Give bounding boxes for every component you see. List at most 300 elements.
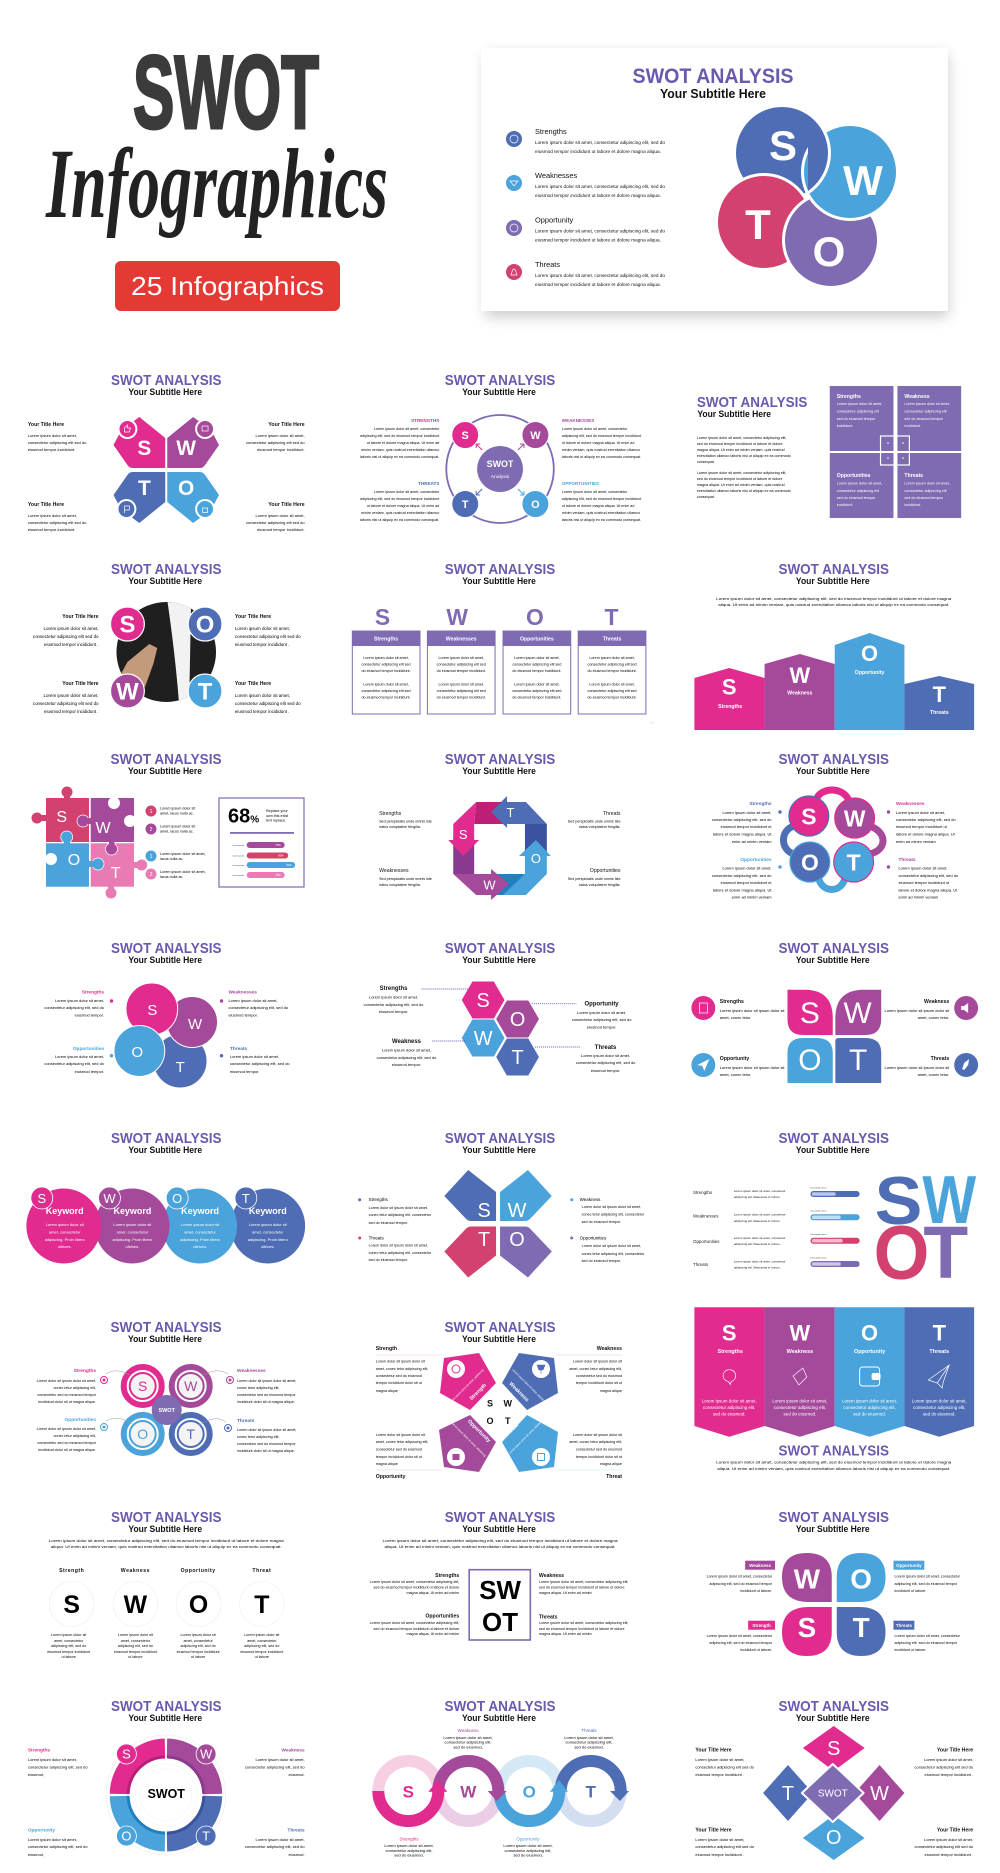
text: left: Lorem ipsum dolor sit amet, — [55, 1054, 104, 1059]
banner: threats: sed do eiusmod. — [923, 1411, 956, 1416]
chart: ring — [446, 415, 554, 523]
text: left: Lorem dolor sit ipsum dolor sit amet, — [37, 1379, 96, 1383]
text: strengths: Lorem ipsum dolor sit amet, consectetur — [374, 427, 440, 431]
chart: connected circles: S — [801, 803, 816, 830]
text: left: Strengths — [435, 1573, 459, 1579]
text: right: labore et dolore magna aliqua. Ut — [896, 832, 956, 837]
body text: magna aliqua. Ut enim ad minim veniam, quis nostrud — [697, 448, 785, 452]
text: threats: Lorem ipsum dolor sit amet, consectetur — [374, 490, 440, 494]
text blocks: natus voluptatem fringilla. — [379, 883, 421, 887]
text blocks: eiusmod tempor incididunt. — [257, 447, 305, 452]
banner: threats: Threats — [929, 1349, 949, 1355]
text: left — [358, 1197, 432, 1262]
text: right: conec tetur adipiscing elit, — [237, 1435, 279, 1439]
chain letters: O — [523, 1783, 536, 1802]
panel: octagon arrows — [379, 752, 621, 900]
keyword texts: adipiscing. Proin libero — [45, 1237, 85, 1242]
text: right — [220, 990, 290, 1074]
text: left: Strengths — [74, 1368, 96, 1374]
text blocks: consectetur adipiscing elit sed do — [33, 634, 99, 639]
text blocks: eiusmod tempor incididunt . — [695, 1852, 744, 1857]
progress bars: Description here — [810, 1233, 827, 1236]
subtitle: Your Subtitle Here — [796, 1713, 870, 1723]
numbered list: 1 — [150, 854, 153, 860]
chart: connected circles: O — [801, 849, 819, 876]
chart: leaves: S — [800, 997, 820, 1030]
text: threats: Threats — [595, 1045, 617, 1051]
text blocks: consectetur adipiscing elit sed do — [28, 520, 87, 525]
chart: puzzle pieces — [32, 786, 147, 898]
text: right: Lorem ipsum dolor sit amet, consectetur adipiscing elit, — [539, 1580, 628, 1584]
text: strengths: eiusmod tempor. — [379, 1009, 408, 1014]
chart: drops: W — [794, 1564, 821, 1595]
subtitle: Your Subtitle Here — [796, 1145, 870, 1155]
text: right: magna alique — [600, 1389, 622, 1393]
text blocks: consectetur adipiscing elit sed do — [28, 440, 87, 445]
text: left: Lorem dolor sit ipsum dolor sit — [376, 1433, 425, 1437]
chart: cycle arrows: O — [531, 851, 541, 866]
chart: ring: W — [530, 430, 541, 442]
quadrant grid: Threats — [904, 473, 923, 479]
heading: Infographics script: Infographics — [45, 128, 388, 239]
subtitle: Your Subtitle Here — [128, 1524, 202, 1534]
text: right: magna alique — [600, 1462, 622, 1466]
keyword texts: ultrices. — [58, 1244, 72, 1249]
text blocks: incididunt ut labore. — [740, 1589, 772, 1593]
big letters: T — [605, 604, 619, 630]
chart: circles: W — [103, 1191, 116, 1206]
panel: four violet quadrants — [697, 386, 961, 518]
text blocks: Lorem ipsum dolor sit amet, consectetur — [894, 1634, 961, 1638]
text: weakness: eiusmod tempor. — [392, 1062, 421, 1067]
leader lines — [376, 1355, 622, 1470]
text blocks: Lorem ipsum dolor sit amet, — [44, 693, 99, 698]
text: right — [237, 1368, 296, 1453]
intro text: aliqua. Ut enim ad minim veniam, quis nostrud exercitation ullamco laboris nisi ut aliquip ex ea commodo consequat. — [718, 602, 949, 607]
progress bars — [810, 1186, 860, 1267]
quadrant grid: Lorem ipsum dolor sit amet, — [837, 402, 882, 406]
text: strengths: sed do eiusmod, — [394, 1852, 424, 1858]
text: left: conec tetur adipiscing elit, — [54, 1386, 96, 1390]
text: right: consectetur sed do eiusmod tempor — [237, 1442, 296, 1446]
chart letters — [745, 122, 883, 275]
text blocks: Your Title Here — [28, 422, 64, 428]
intro text — [383, 1538, 618, 1549]
text blocks: Lorem ipsum dolor sit amet, — [28, 433, 77, 438]
text: right: tempor incididunt dolor sit ut — [576, 1381, 622, 1385]
intro text: Lorem ipsum dolor sit amet, consectetur adipiscing elit, sed do eiusmod tempor incididunt ut labore et dolore magna — [383, 1538, 618, 1543]
body text: Lorem ipsum dolor sit amet, consectetur adipiscing elit, — [697, 436, 786, 440]
text: opportunities: Lorem ipsum dolor sit amet, consectetur — [562, 490, 628, 494]
stat box: Lorem ipsum — [232, 865, 244, 867]
text: right: eiusmod tempor. — [228, 1013, 258, 1018]
bar chart: house bars: Opportunity — [855, 670, 884, 676]
title: SWOT ANALYSIS — [111, 1699, 222, 1715]
text blocks: Lorem ipsum dolor sit ipsum dolor sit — [884, 1065, 950, 1070]
chart: pentagons: Strength — [469, 1383, 488, 1402]
text: left: amet, conec tetur adipiscing elit, — [376, 1440, 428, 1444]
text blocks — [28, 1748, 305, 1857]
text: right: Weaknesses — [237, 1368, 266, 1374]
text: right: conec tetur adipiscing elit, consectetur — [582, 1213, 645, 1217]
subtitle: Your Subtitle Here — [128, 1145, 202, 1155]
title: SWOT ANALYSIS — [110, 752, 222, 768]
text: right: sed do eiusmod tempor incididunt ut labore et dolore — [539, 1586, 625, 1590]
subtitle: Your Subtitle Here — [796, 766, 870, 776]
text: right: Weaknesses — [896, 801, 925, 807]
panel: double rings — [37, 1320, 296, 1453]
text: left: Opportunities — [65, 1417, 96, 1423]
chart: cycle arrows: S — [459, 827, 468, 842]
text blocks: Your Title Here — [62, 681, 99, 687]
chart: pinwheel circles — [716, 106, 898, 288]
quadrant grid: Opportunities — [837, 473, 871, 479]
text blocks: eiusmod tempor incididunt. — [28, 527, 75, 532]
text blocks: eiusmod tempor incididunt . — [924, 1772, 973, 1777]
chart: diamonds: SWOT — [818, 1789, 848, 1800]
chart: puzzle pieces: W — [95, 820, 111, 837]
banner: opportunity: consectetur adipiscing elit, — [843, 1405, 896, 1410]
text: opportunities: adipiscing elit, sed do eiusmod tempor incididunt — [562, 497, 641, 501]
text: left: amet, conec tetur adipiscing elit, — [376, 1367, 428, 1371]
panel: puzzle — [32, 752, 304, 898]
big letters — [375, 604, 619, 630]
ring letters: SWOT — [158, 1408, 176, 1414]
labels: Weaknesses — [693, 1214, 719, 1219]
chart: leaves — [787, 990, 881, 1083]
quadrant grid: Strengths — [837, 394, 861, 400]
text: threats: Lorem ipsum dolor sit amet, — [581, 1053, 630, 1058]
text: strengths: adipiscing elit, sed do eiusmod tempor incididunt — [360, 434, 439, 438]
text blocks: consectetur adipiscing elit sed do — [695, 1844, 755, 1849]
panel: pentagons — [376, 1320, 622, 1480]
text blocks: Sed perspiciatis unde omnis iste — [568, 877, 621, 881]
text: right: consectetur sed do eiusmod tempor — [237, 1393, 296, 1397]
chart: cycle arrows — [448, 796, 551, 900]
column: weakness: Lorem ipsum dolor sit — [118, 1633, 153, 1637]
quadrant grid: sed do eiusmod tempor — [904, 417, 944, 421]
text blocks: consectetur adipiscing elit sed do — [246, 440, 305, 445]
numbered list: 2 — [150, 827, 153, 833]
text: left: Lorem dolor sit ipsum dolor sit — [376, 1360, 425, 1364]
text: threats: THREATS — [418, 481, 439, 486]
text: left: Lorem ipsum dolor sit amet, consectetur adipiscing elit, — [370, 1580, 459, 1584]
column: opportunities: consectetur adipiscing elit sed — [512, 662, 561, 667]
ring letters: S — [122, 1746, 131, 1762]
text blocks: Your Title Here — [62, 614, 99, 620]
text: weaknesses: ut labore et dolore magna aliqua. Ut enim ad — [562, 441, 634, 445]
column: strength: amet, consectetur — [54, 1639, 84, 1643]
text: left: Opportunities — [73, 1046, 104, 1052]
text blocks: Sed perspiciatis unde omnis iste — [379, 820, 432, 824]
list: weaknesses: Lorem ipsum dolor sit amet, consectetur adipiscing elit, sed do — [535, 184, 665, 190]
text blocks: Your Title Here — [268, 422, 305, 428]
text blocks: Lorem ipsum dolor sit amet, — [256, 513, 305, 518]
chart: kites — [444, 1170, 552, 1278]
text: right — [539, 1573, 628, 1636]
text: left: magna alique — [376, 1389, 398, 1393]
bar chart: house bars: Weakness — [787, 690, 813, 697]
title: SWOT ANALYSIS — [445, 373, 556, 389]
text: right: Threats — [230, 1046, 247, 1052]
text blocks: amet, conec tetur. — [918, 1072, 949, 1077]
column: weakness: eiusmod tempor incididunt — [114, 1650, 157, 1654]
text: opportunity: consectetur adipiscing elit, — [505, 1848, 551, 1853]
column: threats — [578, 631, 646, 714]
big letters: O — [526, 604, 544, 630]
banner: threats: consectetur adipiscing elit, — [913, 1405, 965, 1410]
text: left: Lorem ipsum dolor sit amet, — [722, 866, 772, 871]
chart: pentagons — [439, 1353, 558, 1472]
list: opportunity: eiusmod tempor incididunt ut labore et dolore magna aliqua. — [535, 238, 661, 244]
column: strengths: do eiusmod tempor incididunt. — [362, 669, 411, 673]
icon: speaker — [954, 996, 978, 1020]
title: SWOT ANALYSIS — [110, 1320, 222, 1336]
text blocks — [33, 614, 301, 714]
column: opportunity: adipiscing elit, sed do — [181, 1644, 216, 1648]
text: right: Weakness — [597, 1346, 622, 1352]
chain letters: S — [403, 1783, 414, 1802]
quadrant grid: Lorem ipsum dolor sit amet, — [904, 402, 950, 406]
chart: pentagons: Lorem ipsum dolor sit amet, adipiscing — [511, 1368, 548, 1405]
descriptions: adipiscing elit. Maecenas in rutrum. — [734, 1242, 781, 1246]
list: opportunity: Opportunity — [535, 216, 574, 224]
text blocks: eiusmod tempor incididunt . — [695, 1772, 744, 1777]
text blocks: consectetur adipiscing elit sed do — [915, 1844, 974, 1849]
text blocks — [707, 1575, 961, 1652]
text: left: Opportunities — [425, 1614, 459, 1620]
text blocks: Lorem ipsum dolor sit amet, — [695, 1757, 744, 1762]
chart: puzzle pieces: O — [68, 852, 80, 869]
bar chart: house bars: Threats — [930, 710, 949, 716]
column: opportunities — [503, 631, 571, 714]
text blocks: Threats — [931, 1056, 949, 1062]
ring letters: S — [138, 1378, 147, 1394]
text: left: conec tetur adipiscing elit, — [54, 1434, 96, 1438]
SWOT discs — [111, 607, 222, 708]
text: left: Lorem ipsum dolor sit amet, — [55, 998, 104, 1003]
panel: butterfly — [28, 373, 305, 532]
text blocks: Lorem ipsum dolor sit amet, — [924, 1757, 973, 1762]
tags: Opportunity — [896, 1563, 922, 1568]
chart: ring: S — [462, 430, 469, 442]
keyword texts: ultrices. — [261, 1244, 275, 1249]
text blocks: Your Title Here — [937, 1748, 973, 1754]
page number: 44 — [650, 720, 655, 725]
column: opportunity: O — [189, 1591, 208, 1619]
panel: banners — [694, 1307, 974, 1471]
text blocks: consectetur adipiscing elit, sed do — [28, 1765, 88, 1770]
text: left: incididunt dolor sit ut magna alique. — [38, 1448, 96, 1452]
quadrant grid: sed do eiusmod tempor — [837, 417, 876, 421]
text: right: Threats — [539, 1615, 558, 1621]
chart letters: W — [843, 157, 883, 204]
banner: opportunity — [835, 1307, 904, 1437]
text blocks: natus voluptatem fringilla. — [579, 825, 621, 829]
text: right: Lorem ipsum dolor sit amet, consectetur adipiscing elit, — [539, 1621, 628, 1625]
center letters: S — [487, 1399, 493, 1409]
chart: hexagons: O — [510, 1009, 525, 1031]
subtitle: Your Subtitle Here — [128, 1333, 202, 1344]
chart: four arrow wings: W — [176, 437, 196, 460]
text: right: consectetur adipiscing elit, sed do — [228, 1005, 289, 1010]
text: right: consectetur adipiscing elit, sed do — [896, 817, 956, 822]
chart: drops: O — [850, 1564, 872, 1595]
keyword texts: amet, consectetur — [117, 1229, 149, 1235]
text: left — [370, 1573, 459, 1636]
chart: drops: S — [798, 1612, 816, 1643]
title: SWOT ANALYSIS — [111, 562, 222, 578]
quadrant grid: Weakness — [904, 394, 930, 400]
chart: kites: W — [508, 1200, 527, 1222]
panel: hero slide — [481, 48, 948, 317]
banner: weakness: W — [790, 1321, 811, 1346]
text: right: magna aliqua. Ut enim ad minim — [539, 1591, 592, 1595]
chart letters: O — [132, 1044, 143, 1061]
stat box: own this exist — [266, 814, 288, 818]
chart: pentagons: Weakness — [508, 1381, 530, 1403]
text: left: Opportunities — [740, 857, 772, 863]
body text: consequat. — [697, 495, 715, 499]
intro text: Lorem ipsum dolor sit amet, consectetur adipiscing elit, sed do eiusmod tempor incididunt ut labore et dolore magna — [49, 1538, 285, 1543]
panel: plain circles — [47, 1510, 285, 1659]
text blocks: Threats — [603, 811, 621, 817]
text: left: labore et dolore magna aliqua. Ut — [713, 832, 772, 837]
text: right — [570, 1197, 645, 1263]
text blocks: eiusmod tempor incididunt. — [28, 447, 75, 452]
column: strength: ut labore — [62, 1655, 76, 1659]
text: opportunity: consectetur adipiscing elit, sed do — [572, 1017, 632, 1022]
column: strength: adipiscing elit, sed do — [51, 1644, 86, 1648]
keyword texts: amet, consectetur — [184, 1229, 217, 1235]
subtitle: Your Subtitle Here — [128, 576, 202, 586]
keyword texts: ultrices. — [126, 1244, 139, 1249]
text: right: labore et dolore magna aliqua. Ut — [898, 887, 958, 893]
center frame — [469, 1570, 530, 1640]
numbered list: 1 — [150, 809, 153, 815]
text: threats — [564, 1728, 614, 1750]
list: strengths: Strengths — [535, 127, 567, 136]
text blocks: Lorem ipsum dolor sit ipsum dolor sit — [884, 1008, 950, 1013]
chart: circles — [26, 1187, 305, 1264]
text: right: Lorem ipsum dolor sit amet, — [230, 1054, 279, 1059]
text: weakness — [443, 1728, 493, 1750]
chart: puzzle pieces: T — [111, 865, 121, 882]
banner: weakness — [765, 1307, 835, 1437]
chart letters — [132, 1002, 203, 1076]
tags: Threats — [896, 1623, 912, 1628]
panel: diamonds — [695, 1699, 974, 1860]
disc letters: O — [196, 611, 214, 639]
column: opportunity: amet, consectetur — [183, 1639, 213, 1643]
title: SWOT ANALYSIS — [111, 1131, 222, 1147]
numbered list: Lorem ipsum dolor sit — [160, 806, 195, 810]
panel: handshake photo — [33, 562, 301, 714]
column: threat: ut labore — [255, 1655, 269, 1659]
chart: kites: O — [509, 1229, 525, 1251]
labels: Opportunities — [693, 1239, 720, 1244]
stat box: 75% — [275, 843, 281, 847]
badge: 25 Infographics: 25 Infographics — [131, 271, 324, 301]
text blocks: amet, conec tetur. — [918, 1015, 949, 1020]
text blocks: eiusmod tempor incididunt. — [257, 527, 305, 532]
text: weaknesses: Lorem ipsum dolor sit amet, consectetur — [562, 427, 628, 431]
subtitle: Your Subtitle Here — [796, 576, 870, 586]
chart: connected circles — [783, 790, 883, 890]
text blocks: Lorem ipsum dolor sit ipsum dolor sit — [720, 1008, 785, 1013]
text: opportunity: Opportunity — [585, 1002, 619, 1008]
text: weaknesses: laboris nisi ut aliquip ex ea commodo consequat. — [562, 455, 641, 459]
column: threats: do eiusmod tempor incididunt. — [587, 669, 637, 673]
chart: ring: Analysis — [491, 474, 510, 480]
text: weakness: sed do eiusmod, — [453, 1744, 483, 1750]
big SWOT letters — [874, 1163, 976, 1296]
descriptions: Lorem ipsum dolor sit amet, consetetur — [734, 1189, 785, 1193]
title: SWOT ANALYSIS — [111, 941, 222, 957]
text: weaknesses: minim veniam, quis nostrud exercitation ullamco — [562, 448, 640, 452]
text: right: magna aliqua. Ut enim ad minim — [539, 1632, 592, 1636]
ring letters: O — [137, 1426, 148, 1442]
chart: leaves: W — [844, 997, 872, 1030]
column: strengths: Lorem ipsum dolor sit amet, — [363, 682, 409, 687]
column: weaknesses: Lorem ipsum dolor sit amet, — [439, 682, 484, 687]
text: left: Opportunity — [376, 1474, 405, 1480]
big SWOT letters: T — [923, 1211, 968, 1294]
text blocks: eiusmod tempor incididunt . — [44, 642, 99, 647]
text: left: enim ad minim veniam — [732, 894, 772, 900]
keyword texts — [45, 1206, 289, 1249]
text: left: tempor incididunt dolor sit ut — [376, 1381, 422, 1385]
text blocks: Sed perspiciatis unde omnis iste — [379, 877, 432, 881]
column: weaknesses: Weaknesses — [446, 636, 477, 643]
tags: Weakness — [749, 1563, 771, 1568]
quadrant grid: incididunt. — [837, 503, 853, 507]
text: strengths: Lorem ipsum dolor sit amet, — [369, 995, 418, 1000]
column: threats: Lorem ipsum dolor sit amet, — [589, 682, 635, 687]
text: right: Threats — [237, 1418, 255, 1424]
text: opportunities: OPPORTUNITIES — [562, 481, 599, 486]
quadrant grid: Lorem ipsum dolor sit amet, — [837, 481, 882, 486]
title: SWOT ANALYSIS — [778, 1699, 889, 1715]
panel: framed SWOT — [370, 1510, 628, 1640]
photo circle — [114, 600, 219, 705]
chart letters: O — [813, 228, 845, 275]
banner: weakness: consectetur adipiscing elit, — [774, 1405, 826, 1410]
hero title: SWOT ANALYSIS — [632, 65, 794, 88]
badge: 25 Infographics — [115, 261, 340, 311]
disc letters — [116, 611, 214, 706]
text blocks: incididunt ut labore. — [894, 1648, 926, 1652]
text: left: Strength — [376, 1346, 397, 1352]
subtitle: Your Subtitle Here — [462, 1524, 536, 1534]
column: weakness: W — [124, 1591, 148, 1619]
hero subtitle: Your Subtitle Here — [660, 86, 766, 101]
stat box: 80% — [278, 854, 284, 858]
text: weakness: Weakness — [458, 1728, 479, 1733]
title: SWOT ANALYSIS — [444, 1699, 556, 1715]
column: threat: Threat — [252, 1568, 271, 1574]
column: threats: consectetur adipiscing elit sed — [587, 689, 637, 693]
text: left: eiusmod tempor incididunt ut — [721, 880, 772, 885]
text: strengths: STRENGTHS — [411, 418, 439, 423]
text: left: sed do eiusmod tempor. — [369, 1258, 408, 1262]
body text: Lorem ipsum dolor sit amet, consectetur adipiscing elit, — [697, 471, 786, 475]
text: strengths: consectetur adipiscing elit, — [386, 1848, 432, 1853]
text: right: conec tetur adipiscing elit, — [237, 1386, 279, 1390]
chart: leaves: O — [798, 1044, 821, 1077]
labels — [693, 1190, 720, 1267]
stat box: 75% — [275, 873, 281, 877]
